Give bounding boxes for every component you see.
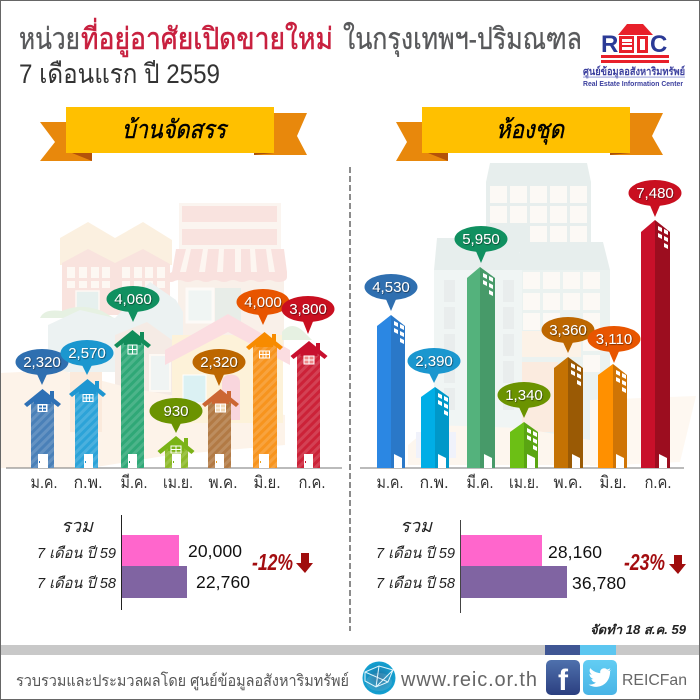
panel: houses total comparison: -12%	[252, 549, 293, 575]
title: ที่อยู่อาศัยเปิดขายใหม่	[81, 18, 333, 57]
tower: Mar 5,950	[454, 226, 508, 468]
ribbon: condominium heading	[396, 107, 663, 161]
logo: REIC	[583, 24, 685, 88]
panel: condominium total comparison: -23%	[624, 549, 665, 575]
logo: REIC: Real Estate Information Center	[583, 81, 683, 88]
month labels: houses	[30, 473, 326, 492]
tower: Feb 2,390	[408, 348, 460, 468]
house: Mar 4,060	[106, 286, 160, 468]
panel: houses total comparison: รวม	[61, 516, 94, 536]
tower: Mar 5,950: 5,950	[462, 231, 500, 248]
panel: houses total comparison: 20,000	[188, 541, 242, 561]
house: Feb 2,570	[60, 340, 114, 468]
title: หน่วย	[19, 23, 80, 56]
month labels: condominiums: ก.ค.	[644, 473, 672, 492]
month labels: houses: พ.ค.	[208, 473, 238, 492]
chart: houses by month	[16, 286, 334, 492]
ribbon: condominium heading: ห้องชุด	[496, 116, 566, 145]
tower: Jun 3,110: 3,110	[596, 331, 632, 348]
panel: condominium total comparison: รวม	[400, 516, 433, 536]
month labels: houses: มี.ค.	[120, 473, 148, 492]
background illustration: houses	[0, 203, 312, 468]
icon: facebook	[546, 660, 580, 697]
social handle: REICFan	[622, 672, 687, 689]
logo: REIC: ศูนย์ข้อมูลอสังหาริมทรัพย์	[583, 65, 685, 79]
house: Feb 2,570: 2,570	[68, 345, 106, 362]
tower: Jan 4,530: 4,530	[372, 279, 410, 296]
month labels: houses: ก.ค.	[298, 473, 326, 492]
house: Jul 3,800	[282, 296, 334, 468]
house: May 2,320: 2,320	[200, 354, 238, 371]
tower: Apr 1,340	[498, 382, 550, 468]
tower: Jul 7,480: 7,480	[636, 185, 674, 202]
footer bar	[1, 645, 699, 655]
house: May 2,320	[192, 349, 246, 468]
subtitle: 7 เดือนแรก ปี 2559	[19, 59, 220, 89]
house: Apr 930: 930	[163, 403, 189, 420]
month labels: houses: เม.ย.	[163, 473, 193, 492]
month labels: houses: มิ.ย.	[254, 473, 280, 492]
tower: Jun 3,110	[588, 326, 640, 468]
panel: houses total comparison: 22,760	[196, 572, 250, 592]
tower: May 3,360	[542, 317, 594, 468]
month labels: condominiums: ก.พ.	[420, 473, 448, 492]
month labels: condominiums: มี.ค.	[466, 473, 494, 492]
chart: condominiums by month	[364, 180, 682, 492]
house: Mar 4,060: 4,060	[114, 291, 152, 308]
icon: twitter	[583, 660, 617, 695]
month labels: houses: ก.พ.	[74, 473, 102, 492]
background illustration: towers	[408, 163, 696, 466]
month labels: condominiums: พ.ค.	[554, 473, 582, 492]
tower: Jan 4,530	[364, 274, 418, 468]
month labels: condominiums: เม.ย.	[509, 473, 539, 492]
house: Jul 3,800: 3,800	[289, 301, 327, 318]
panel: houses total comparison: 7 เดือน ปี 59	[37, 545, 117, 562]
date note: จัดทำ 18 ส.ค. 59	[590, 623, 686, 637]
tower: Jul 7,480	[628, 180, 682, 468]
house: Jan 2,320	[16, 349, 68, 468]
month labels: condominiums	[376, 473, 672, 492]
house: Apr 930	[150, 398, 202, 468]
tower: Apr 1,340: 1,340	[505, 387, 543, 404]
tower: May 3,360: 3,360	[549, 322, 587, 339]
panel: condominium total comparison: 36,780	[572, 573, 626, 593]
website url: www.reic.or.th	[400, 669, 537, 691]
panel: condominium total comparison: 7 เดือน ปี 58	[376, 575, 456, 592]
ribbon: houses heading: บ้านจัดสรร	[122, 116, 228, 144]
icon: facebook: f	[558, 664, 569, 697]
panel: condominium total comparison: 7 เดือน ปี 59	[376, 545, 456, 562]
month labels: houses: ม.ค.	[30, 473, 58, 492]
house: Jun 4,000: 4,000	[244, 294, 282, 311]
month labels: condominiums: มิ.ย.	[600, 473, 626, 492]
panel: houses total comparison: 7 เดือน ปี 58	[37, 575, 117, 592]
logo: REIC: C	[650, 31, 667, 58]
panel: condominium total comparison	[376, 516, 686, 613]
ribbon: houses heading	[40, 107, 307, 161]
icon: globe	[362, 662, 396, 694]
logo: REIC: R	[601, 31, 618, 58]
title	[19, 18, 582, 58]
tower: Feb 2,390: 2,390	[415, 353, 453, 370]
panel: houses total comparison	[37, 515, 313, 610]
house: Jun 4,000	[236, 289, 290, 468]
footer credit: รวบรวมและประมวลผลโดย ศูนย์ข้อมูลอสังหาริมทรัพย์	[16, 671, 349, 691]
title: ในกรุงเทพฯ-ปริมณฑล	[343, 22, 582, 58]
house: Jan 2,320: 2,320	[23, 354, 61, 371]
month labels: condominiums: ม.ค.	[376, 473, 404, 492]
panel: condominium total comparison: 28,160	[548, 542, 602, 562]
